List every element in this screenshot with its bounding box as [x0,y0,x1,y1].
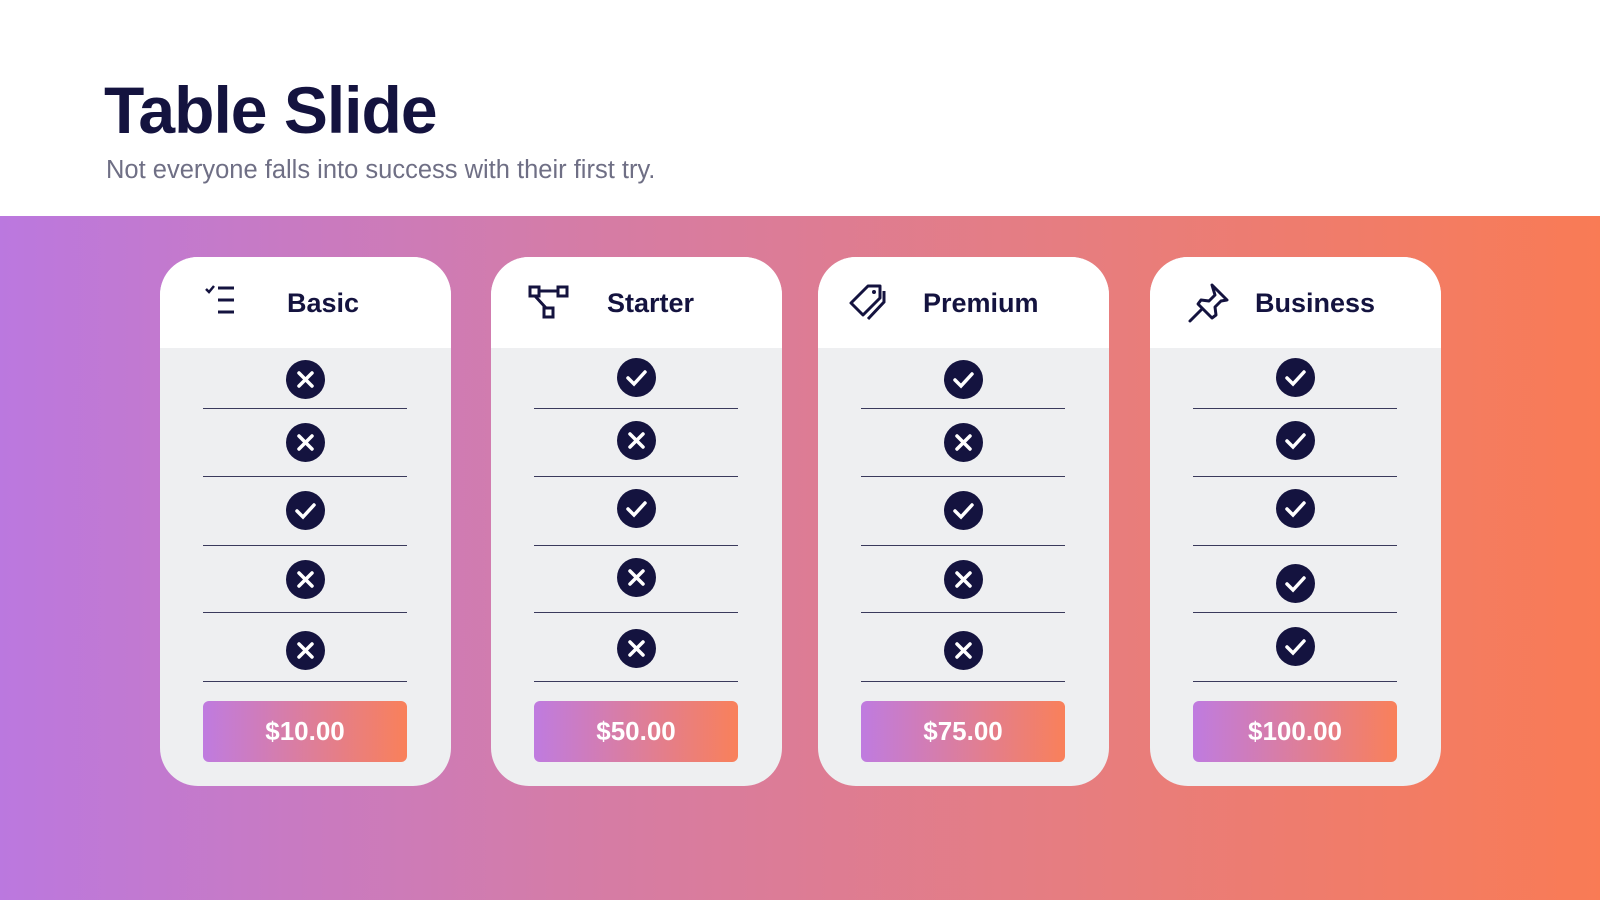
header: Basic [160,257,451,348]
price button [534,701,738,762]
panel: Starter [491,257,782,786]
row marks [203,360,407,682]
price button [203,701,407,762]
price button: $50.00 [596,716,676,746]
header: Starter: Starter [607,288,694,318]
header: Basic: Basic [287,288,359,318]
row marks [534,358,738,682]
header: Starter [491,257,782,348]
row marks [861,360,1065,682]
price button [861,701,1065,762]
gradient background band [0,216,1600,900]
price button: $75.00 [923,716,1003,746]
panel: Basic [160,257,451,786]
row marks [1193,358,1397,682]
subtitle: Not everyone falls into success with their first try. [106,156,655,184]
header: Business [1150,257,1441,348]
header: Business: Business [1255,288,1375,318]
header: Premium: Premium [923,288,1039,318]
price button: $10.00 [265,716,345,746]
price button [1193,701,1397,762]
panel: Business [1150,257,1441,786]
price button: $100.00 [1248,716,1342,746]
panel: Premium [818,257,1109,786]
title: Table Slide [104,73,437,147]
header: Premium [818,257,1109,348]
